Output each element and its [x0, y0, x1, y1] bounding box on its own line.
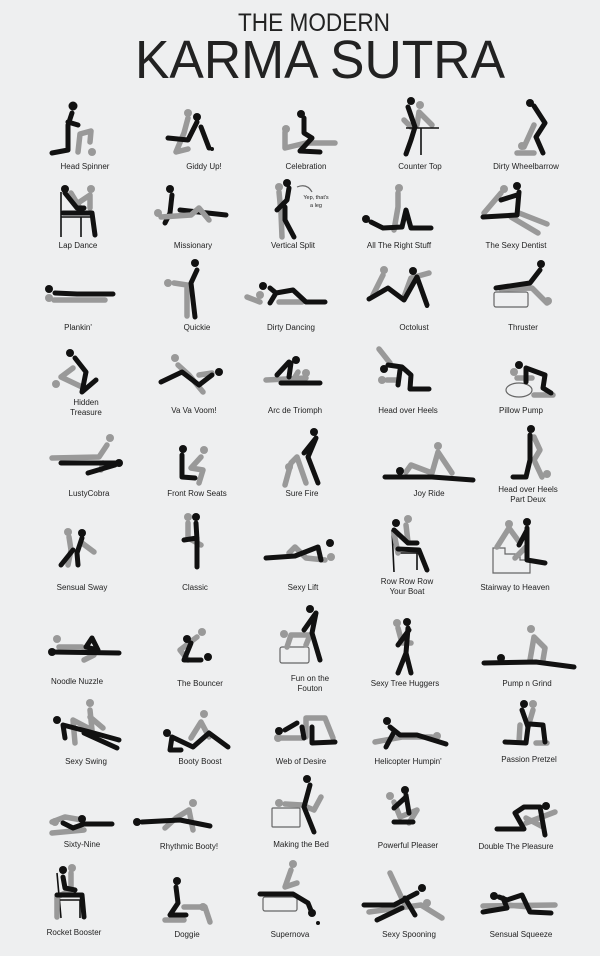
- icon: Web of Desire: [274, 718, 335, 743]
- panel: Head over Heels Part Deux: [498, 425, 558, 504]
- icon: Making the Bed: [272, 775, 321, 832]
- label: Va Va Voom!: [171, 406, 217, 415]
- panel: Passion Pretzel: [501, 700, 557, 764]
- icon: The Bouncer: [180, 628, 212, 661]
- panel: Double The Pleasure: [478, 802, 555, 851]
- panel: Noodle Nuzzle: [48, 635, 119, 686]
- title: KARMA SUTRA: [135, 30, 505, 90]
- label: Passion Pretzel: [501, 755, 557, 764]
- icon: Counter Top: [404, 97, 439, 155]
- panel: Dirty Wheelbarrow: [493, 99, 559, 171]
- label: The Bouncer: [177, 679, 223, 688]
- icon: Vertical Split: a leg: [310, 203, 322, 209]
- label: Sensual Sway: [57, 583, 107, 592]
- icon: Dirty Wheelbarrow: [517, 99, 545, 153]
- panel: Vertical Split: [271, 179, 329, 250]
- label: Missionary: [174, 241, 212, 250]
- icon: Passion Pretzel: [505, 700, 547, 743]
- panel: Hidden Treasure: [52, 349, 102, 417]
- icon: Lap Dance: [61, 185, 95, 237]
- panel: Thruster: [494, 260, 552, 332]
- label: Fouton: [298, 684, 322, 693]
- label: Supernova: [271, 930, 310, 939]
- panel: Sensual Sway: [57, 528, 107, 592]
- icon: Double The Pleasure: [497, 802, 555, 835]
- label: Dirty Wheelbarrow: [493, 162, 559, 171]
- label: Stairway to Heaven: [480, 583, 550, 592]
- icon: Arc de Triomph: [266, 356, 320, 383]
- label: Sensual Squeeze: [490, 930, 553, 939]
- icon: Giddy Up: [168, 109, 214, 152]
- icon: Sexy Spooning: [364, 873, 442, 920]
- icon: Rocket Booster: [57, 864, 84, 918]
- icon: Helicopter Humpin: [375, 717, 446, 747]
- icon: The Sexy Dentist: [483, 182, 547, 233]
- icon: Vertical Split: Yep, that's: [303, 195, 329, 201]
- icon: Hidden Treasure: [52, 349, 96, 392]
- label: Head over Heels: [378, 406, 438, 415]
- icon: Pump n Grind: [484, 625, 574, 667]
- icon: Sixty-Nine: [51, 815, 112, 833]
- label: The Sexy Dentist: [486, 241, 547, 250]
- label: Head over Heels: [498, 485, 558, 494]
- panel: Rhythmic Booty: [133, 799, 218, 851]
- icon: Sensual Squeeze: [483, 892, 555, 913]
- label: Fun on the: [291, 674, 329, 683]
- label: Vertical Split: [271, 241, 316, 250]
- icon: Dirty Dancing: [247, 282, 325, 303]
- panel: Front Row Seats: [167, 445, 227, 498]
- panel: All The Right Stuff: [362, 184, 432, 250]
- panel: Joy Ride: [385, 442, 473, 498]
- icon: Rhythmic Booty: [133, 799, 210, 830]
- label: Row Row Row: [381, 577, 433, 586]
- icon: Sexy Swing: [53, 699, 119, 748]
- icon: Joy Ride: [385, 442, 473, 480]
- label: Treasure: [70, 408, 102, 417]
- icon: Missionary: [154, 185, 226, 223]
- panel: Quickie: [164, 259, 211, 332]
- icon: Supernova: [260, 860, 320, 925]
- panel: Helicopter Humpin: [374, 717, 446, 766]
- label: Arc de Triomph: [268, 406, 322, 415]
- icon: Doggie: [165, 877, 210, 922]
- label: Pump n Grind: [502, 679, 552, 688]
- label: Sexy Swing: [65, 757, 107, 766]
- panel: Web of Desire: [274, 718, 335, 766]
- icon: Head Spinner: [52, 102, 96, 156]
- label: Rhythmic Booty!: [160, 842, 218, 851]
- label: Sexy Lift: [288, 583, 319, 592]
- label: Sexy Tree Huggers: [371, 679, 439, 688]
- panel: The Sexy Dentist: [483, 182, 547, 250]
- label: Double The Pleasure: [478, 842, 554, 851]
- icon: Classic: [184, 513, 201, 567]
- icon: Stairway to Heaven: [493, 518, 545, 573]
- icon: Row Row Row Your Boat: [392, 515, 427, 572]
- panel: The Bouncer: [177, 628, 223, 688]
- icon: Sensual Sway: [61, 528, 94, 565]
- panel: Sexy Tree Huggers: [371, 618, 439, 688]
- icon: Noodle Nuzzle: [48, 635, 119, 660]
- label: Booty Boost: [178, 757, 222, 766]
- label: Dirty Dancing: [267, 323, 315, 332]
- icon: Octolust: [369, 266, 429, 308]
- label: Part Deux: [510, 495, 546, 504]
- label: Celebration: [286, 162, 326, 171]
- icon: Celebration: [282, 110, 335, 152]
- label: Sure Fire: [286, 489, 319, 498]
- panel: Lap Dance: [59, 185, 98, 250]
- panel: Pillow Pump: [499, 361, 553, 415]
- label: Lap Dance: [59, 241, 98, 250]
- title: THE MODERN: [238, 9, 390, 37]
- label: Front Row Seats: [167, 489, 227, 498]
- panel: Giddy Up: [168, 109, 222, 171]
- panel: Powerful Pleaser: [378, 786, 439, 850]
- icon: Front Row Seats: [179, 445, 208, 483]
- panel: Row Row Row Your Boat: [381, 515, 433, 596]
- panel: Stairway to Heaven: [480, 518, 550, 592]
- label: Sexy Spooning: [382, 930, 436, 939]
- panel: Plankin: [45, 285, 113, 332]
- panel: Head Spinner: [52, 102, 110, 171]
- label: Counter Top: [398, 162, 442, 171]
- icon: Plankin: [45, 285, 113, 302]
- icon: Thruster: [494, 260, 552, 307]
- panel: Arc de Triomph: [266, 356, 322, 415]
- label: All The Right Stuff: [367, 241, 432, 250]
- label: Noodle Nuzzle: [51, 677, 104, 686]
- icon: Sexy Tree Huggers: [393, 618, 411, 673]
- label: Doggie: [174, 930, 200, 939]
- panel: Supernova: [260, 860, 320, 939]
- panel: Fun on the Fouton: [280, 605, 330, 693]
- panel: Making the Bed: [272, 775, 329, 849]
- label: Classic: [182, 583, 208, 592]
- panel: Sexy Spooning: [364, 873, 442, 939]
- label: Plankin': [64, 323, 92, 332]
- label: Sixty-Nine: [64, 840, 101, 849]
- icon: Fun on the Fouton: [280, 605, 320, 663]
- icon: Pillow Pump: [506, 361, 553, 397]
- panel: Classic: [182, 513, 208, 592]
- panel: Pump n Grind: [484, 625, 574, 688]
- label: LustyCobra: [69, 489, 110, 498]
- panel: Booty Boost: [163, 710, 228, 766]
- label: Thruster: [508, 323, 538, 332]
- icon: Sure Fire: [285, 428, 318, 485]
- panel: Celebration: [282, 110, 335, 171]
- panel: Sure Fire: [285, 428, 319, 498]
- label: Head Spinner: [61, 162, 110, 171]
- icon: Quickie: [164, 259, 199, 317]
- panel: LustyCobra: [52, 434, 123, 498]
- panel: Va Va Voom: [161, 354, 223, 415]
- label: Making the Bed: [273, 840, 329, 849]
- panel: Counter Top: [398, 97, 442, 171]
- panel: Doggie: [165, 877, 210, 939]
- label: Giddy Up!: [186, 162, 222, 171]
- label: Helicopter Humpin': [374, 757, 442, 766]
- icon: Booty Boost: [163, 710, 228, 750]
- panel: Sexy Lift: [266, 539, 335, 592]
- icon: LustyCobra: [52, 434, 123, 473]
- label: Pillow Pump: [499, 406, 544, 415]
- icon: Vertical Split: [275, 179, 329, 237]
- icon: Sexy Lift: [266, 539, 335, 561]
- panel: Missionary: [154, 185, 226, 250]
- panel: Dirty Dancing: [247, 282, 325, 332]
- panel: Sensual Squeeze: [483, 892, 555, 939]
- icon: Head over Heels: [378, 349, 429, 389]
- label: Hidden: [73, 398, 99, 407]
- label: Powerful Pleaser: [378, 841, 439, 850]
- panel: Sexy Swing: [53, 699, 119, 766]
- panel: Sixty-Nine: [51, 815, 112, 849]
- label: Quickie: [184, 323, 211, 332]
- label: Your Boat: [390, 587, 425, 596]
- icon: Head over Heels Part Deux: [513, 425, 551, 478]
- panel: Head over Heels: [378, 349, 438, 415]
- label: Rocket Booster: [47, 928, 102, 937]
- icon: Powerful Pleaser: [386, 786, 417, 823]
- label: Octolust: [399, 323, 429, 332]
- icon: Va Va Voom: [161, 354, 223, 392]
- panel: Octolust: [369, 266, 429, 332]
- icon: All The Right Stuff: [362, 184, 431, 230]
- label: Joy Ride: [413, 489, 445, 498]
- panel: Rocket Booster: [47, 864, 102, 937]
- label: Web of Desire: [276, 757, 327, 766]
